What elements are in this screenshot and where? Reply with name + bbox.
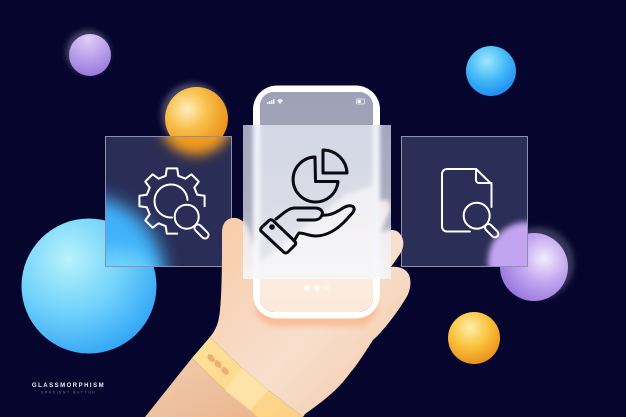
panel: right glass card: [401, 136, 528, 267]
panel: left glass card: [105, 136, 232, 267]
hand holding phone: [145, 200, 410, 417]
sphere: small purple: [66, 30, 111, 76]
sphere: large blue: [22, 218, 156, 354]
title: glassmorphism label: GRADIENT BUTTON: [41, 390, 96, 394]
glow under phone: [256, 274, 377, 326]
icon: gear with magnifier: [139, 168, 210, 240]
phone status bar: [267, 99, 364, 104]
icon: document with magnifier: [442, 169, 500, 239]
sphere: yellow: [448, 312, 500, 364]
panel: center glass card: [243, 125, 391, 279]
arm: [145, 358, 262, 417]
title: glassmorphism label: [32, 383, 105, 394]
title: glassmorphism label: GLASSMORPHISM: [32, 383, 105, 389]
phone pagination dots: [304, 285, 330, 291]
hand and phone: [145, 86, 410, 417]
sphere: purple right: [500, 227, 574, 301]
wristband: [192, 337, 303, 417]
icon: hand holding pie chart: [261, 150, 354, 253]
sphere: blue top right: [466, 46, 516, 96]
phone: [250, 86, 382, 318]
sphere: orange: [161, 83, 228, 150]
palm and fingers: [210, 200, 410, 417]
